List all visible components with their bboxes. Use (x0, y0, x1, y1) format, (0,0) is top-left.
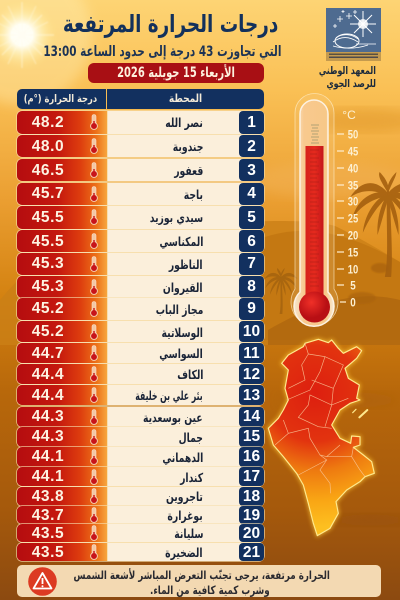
row 11: 11 (243, 344, 260, 362)
row 15: 15 (243, 428, 260, 445)
row 10 (16, 320, 265, 342)
row 19 (16, 505, 265, 524)
title: درجات الحرارة المرتفعة (63, 10, 278, 38)
row 3: 46.5 (32, 162, 64, 178)
row 19: 43.7 (32, 506, 64, 524)
row 19: 19 (243, 506, 260, 524)
logo: national meteorology institute (319, 8, 381, 90)
row 4: 4 (247, 185, 256, 202)
row 20: 43.5 (32, 524, 64, 542)
row 14: 44.3 (32, 408, 64, 425)
large thermometer with Celsius scale (290, 93, 358, 327)
row 13: 44.4 (32, 386, 64, 404)
row 11: السواسي (160, 346, 203, 361)
row 9 (16, 297, 265, 320)
row 3 (16, 158, 265, 182)
row 3: قعفور (174, 163, 203, 178)
row 19: بوغرارة (168, 508, 203, 523)
row 15: 44.3 (32, 428, 64, 445)
row 17: 17 (243, 468, 260, 485)
row 10: 10 (243, 323, 260, 340)
large thermometer with Celsius scale: 0 (350, 296, 356, 310)
row 1: 1 (247, 114, 256, 131)
row 21: 21 (243, 544, 260, 560)
map of Tunisia (265, 336, 378, 539)
row 5: سيدي بوزيد (150, 210, 203, 225)
icon: warning triangle (28, 567, 57, 596)
row 17: كندار (180, 470, 203, 484)
table header: temperature column (17, 89, 106, 109)
row 3: 3 (247, 162, 256, 178)
ranking table (16, 110, 265, 562)
row 12: 12 (243, 366, 260, 382)
large thermometer with Celsius scale: 45 (348, 144, 358, 158)
date text: الأربعاء 15 جويلية 2026 (117, 65, 235, 81)
row 4 (16, 182, 265, 206)
row 4: 45.7 (32, 185, 64, 202)
row 17 (16, 466, 265, 486)
row 18: 18 (243, 488, 260, 505)
large thermometer with Celsius scale: 25 (348, 212, 358, 226)
row 2: 48.0 (32, 138, 64, 154)
row 8: 8 (247, 278, 256, 295)
row 2: 2 (247, 138, 256, 154)
row 5: 45.5 (32, 209, 64, 226)
row 18: تاجروين (166, 489, 203, 504)
row 1 (16, 110, 265, 134)
row 8 (16, 276, 265, 298)
row 7 (16, 252, 265, 276)
row 12: الكاف (177, 367, 203, 382)
row 14 (16, 406, 265, 428)
warning message (73, 568, 330, 597)
row 11: 44.7 (32, 344, 64, 362)
row 1: نصر الله (165, 115, 203, 130)
row 14: 14 (243, 408, 260, 425)
row 6: المكناسي (159, 234, 203, 249)
row 11 (16, 342, 265, 364)
row 6 (16, 230, 265, 252)
row 2 (16, 134, 265, 158)
date banner (88, 63, 264, 83)
row 21: الضخيرة (166, 545, 203, 560)
row 13 (16, 384, 265, 406)
row 10: 45.2 (32, 323, 64, 340)
station column label: المحطة (169, 92, 202, 105)
large thermometer with Celsius scale: 20 (348, 228, 358, 242)
row 5 (16, 206, 265, 230)
subtitle: التي تجاوزت 43 درجة إلى حدود الساعة 13:00 (43, 44, 281, 60)
row 17: 44.1 (32, 468, 64, 485)
row 14: عين بوسعدية (143, 410, 203, 425)
row 15: جمال (179, 430, 203, 445)
large thermometer with Celsius scale: 30 (348, 194, 358, 208)
large thermometer with Celsius scale: 10 (348, 262, 358, 276)
row 18 (16, 486, 265, 506)
row 1: 48.2 (32, 114, 64, 131)
row 20: سليانة (174, 526, 203, 541)
warning message: الحرارة مرتفعة، يرجى تجنّب التعرض المباشر لأشعة الشمس (73, 568, 330, 582)
row 9: مجاز الباب (155, 302, 203, 317)
row 2: جندوبة (172, 139, 203, 154)
large thermometer with Celsius scale: °C (342, 108, 356, 122)
row 8: القيروان (163, 280, 203, 295)
row 20: 20 (243, 524, 260, 542)
large thermometer with Celsius scale: 15 (348, 246, 358, 260)
logo caption (319, 64, 376, 90)
temperature column label: درجة الحرارة (°م) (24, 93, 97, 105)
logo emblem (326, 8, 381, 61)
row 12: 44.4 (32, 366, 64, 382)
row 16: 44.1 (32, 448, 64, 465)
row 7: 45.3 (32, 255, 64, 272)
logo caption: للرصد الجوي (326, 77, 376, 90)
logo caption: المعهد الوطني (319, 64, 376, 77)
row 21 (16, 542, 265, 562)
large thermometer with Celsius scale: 40 (348, 162, 358, 176)
large thermometer with Celsius scale: 35 (348, 178, 358, 192)
row 7: 7 (247, 255, 256, 272)
row 8: 45.3 (32, 278, 64, 295)
row 5: 5 (247, 209, 256, 226)
row 18: 43.8 (32, 488, 64, 505)
row 9: 45.2 (32, 300, 64, 317)
row 7: الناظور (169, 257, 203, 272)
row 12 (16, 364, 265, 384)
row 13: بئر علي بن خليفة (136, 388, 203, 403)
row 20 (16, 523, 265, 542)
row 21: 43.5 (32, 544, 64, 560)
large thermometer with Celsius scale: 50 (348, 128, 358, 142)
row 16 (16, 446, 265, 468)
row 16: الدهماني (162, 450, 203, 465)
warning box (17, 565, 381, 597)
row 16: 16 (243, 448, 260, 465)
row 6: 45.5 (32, 232, 64, 250)
large thermometer with Celsius scale: 5 (350, 278, 356, 292)
row 9: 9 (247, 300, 256, 317)
row 15 (16, 426, 265, 448)
warning message: وشرب كمية كافية من الماء. (150, 582, 270, 596)
table header: station column (107, 89, 264, 109)
row 10: الوسلاتية (162, 324, 203, 340)
row 13: 13 (243, 386, 260, 404)
row 6: 6 (247, 232, 256, 250)
row 4: باجة (184, 187, 203, 202)
